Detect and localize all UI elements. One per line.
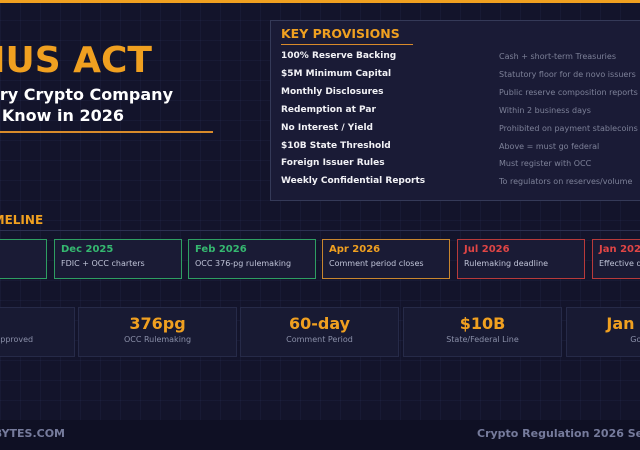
provisions list: Foreign Issuer Rules: [281, 158, 385, 168]
provisions list: Public reserve composition reports: [499, 88, 638, 97]
stats row: 376pg: [129, 314, 186, 333]
timeline: Apr 2026: [329, 244, 380, 255]
provisions list: Statutory floor for de novo issuers: [499, 70, 636, 79]
title underline: [0, 131, 213, 133]
footer: [0, 420, 640, 450]
top accent bar: [0, 0, 640, 3]
provisions list: Redemption at Par: [281, 105, 376, 115]
provisions list: $10B State Threshold: [281, 141, 391, 151]
heading: key provisions: KEY PROVISIONS: [281, 26, 400, 41]
provisions list: No Interest / Yield: [281, 123, 373, 133]
provisions list: Monthly Disclosures: [281, 87, 384, 97]
stats row: Comment Period: [286, 335, 353, 344]
provisions list: $5M Minimum Capital: [281, 69, 391, 79]
provisions list: [281, 51, 638, 186]
subtitle: [0, 85, 173, 125]
provisions list: Cash + short-term Treasuries: [499, 52, 616, 61]
timeline: Dec 2025: [61, 244, 113, 255]
provisions list: To regulators on reserves/volume: [499, 177, 632, 186]
provisions list: Above = must go federal: [499, 142, 599, 151]
stats row: [0, 307, 640, 357]
stats row: State/Federal Line: [446, 335, 519, 344]
stats row: $10B: [460, 314, 505, 333]
stats row: OCC Rulemaking: [124, 335, 191, 344]
provisions list: Prohibited on payment stablecoins: [499, 124, 638, 133]
provisions list: Weekly Confidential Reports: [281, 176, 425, 186]
timeline: Comment period closes: [329, 259, 424, 268]
timeline: FDIC + OCC charters: [61, 259, 145, 268]
timeline: OCC 376-pg rulemaking: [195, 259, 291, 268]
provisions list: Within 2 business days: [499, 106, 591, 115]
provisions list: Must register with OCC: [499, 159, 591, 168]
timeline: Feb 2026: [195, 244, 247, 255]
timeline: [0, 239, 640, 279]
provisions list: 100% Reserve Backing: [281, 51, 396, 61]
panel: key provisions: [270, 20, 640, 201]
timeline: Jul 2026: [464, 244, 510, 255]
stats row: 60-day: [289, 314, 350, 333]
timeline: Rulemaking deadline: [464, 259, 548, 268]
